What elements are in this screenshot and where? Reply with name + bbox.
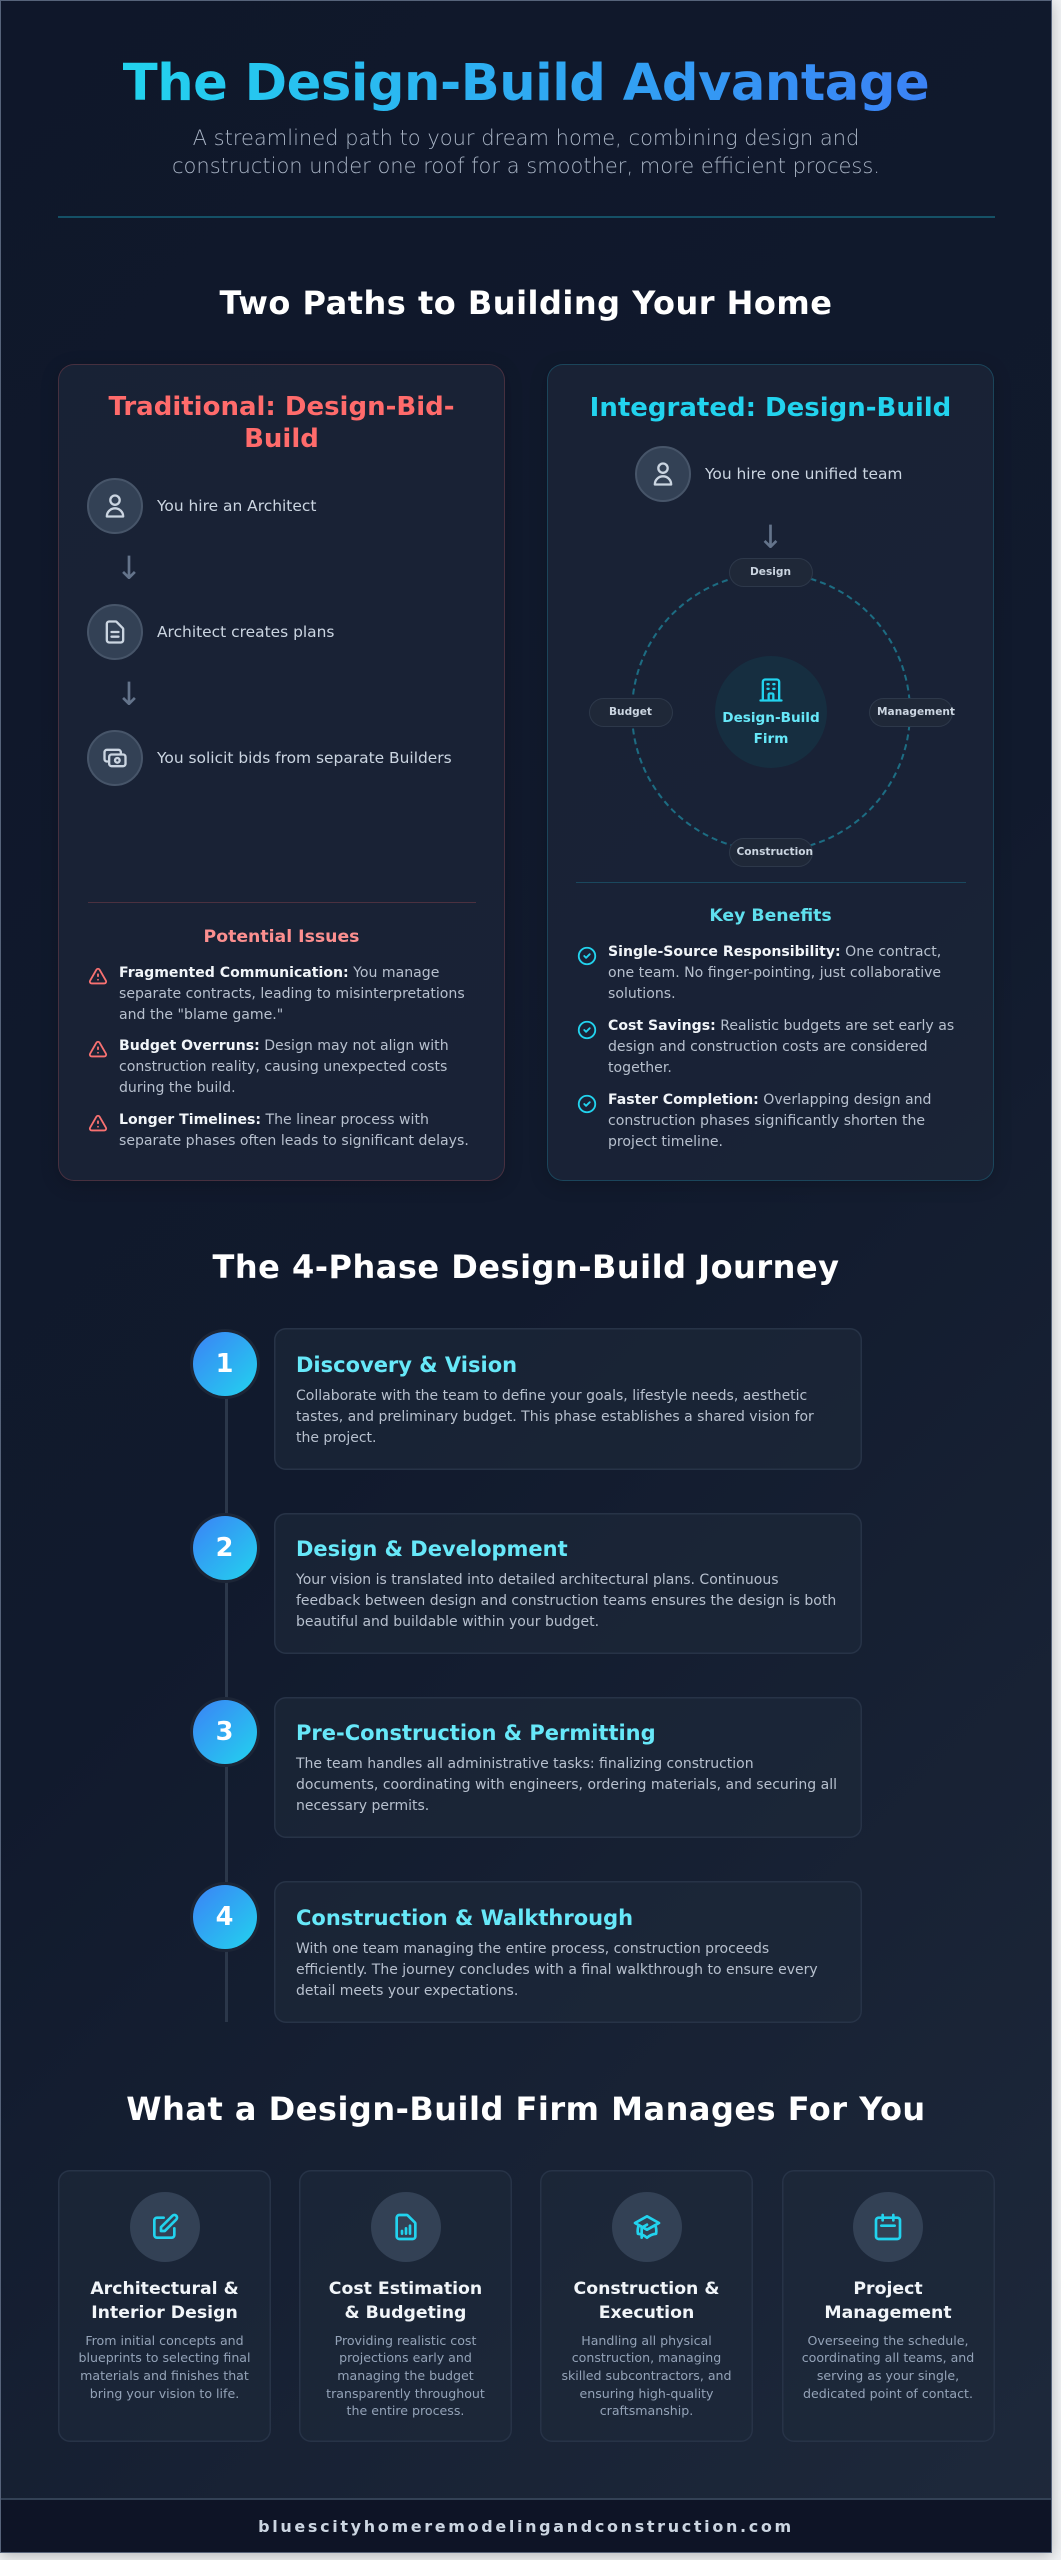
sub-heading: potential issues: Potential Issues	[204, 927, 359, 947]
icon: document	[87, 604, 143, 660]
card title: Construction &	[574, 2279, 719, 2299]
step text: You hire one unified team	[705, 465, 902, 483]
phase text: feedback between design and construction teams ensures the design is both	[296, 1593, 836, 1609]
phase text: With one team managing the entire process, construction proceeds	[296, 1941, 769, 1957]
icon: calendar	[853, 2192, 923, 2262]
icon: check	[578, 946, 596, 966]
card title: Interior Design	[91, 2303, 238, 2323]
phase text: documents, coordinating with engineers, ordering materials, and securing all	[296, 1777, 837, 1793]
phase text: efficiently. The journey concludes with a final walkthrough to ensure every	[296, 1962, 818, 1978]
heading: what a firm manages: What a Design-Build Firm Manages For You	[126, 2090, 926, 2128]
service card: construction	[540, 2170, 753, 2442]
phase card	[274, 1696, 862, 1838]
phase card	[274, 1512, 862, 1654]
number badge	[192, 1332, 256, 1396]
pill: construction	[728, 838, 812, 867]
issue: budget overruns	[88, 1038, 449, 1096]
phase title: Design & Development	[296, 1537, 568, 1561]
phase title: Construction & Walkthrough	[296, 1906, 633, 1930]
benefit text: one team. No finger-pointing, just collaborative	[608, 965, 941, 981]
icon: warning	[88, 968, 108, 984]
card text: skilled subcontractors, and	[561, 2368, 732, 2383]
number badge: 3	[216, 1717, 233, 1747]
card text	[540, 2332, 753, 2420]
panel title: Build	[244, 424, 319, 454]
footer	[0, 2498, 1052, 2553]
pill: construction: Construction	[736, 846, 813, 858]
card text	[299, 2332, 512, 2420]
panel title: Integrated: Design-Build	[590, 393, 951, 423]
phase text	[296, 1941, 818, 1999]
benefit: cost savings	[578, 1018, 954, 1076]
phase text: Collaborate with the team to define your goals, lifestyle needs, aesthetic	[296, 1388, 807, 1404]
issue text: and the "blame game."	[119, 1007, 283, 1023]
card text: Handling all physical	[581, 2333, 712, 2348]
card text: Providing realistic cost	[335, 2333, 476, 2348]
number badge	[192, 1884, 256, 1948]
phase text: detail meets your expectations.	[296, 1983, 518, 1999]
card text	[782, 2332, 994, 2402]
number badge: 2	[216, 1533, 233, 1563]
card title: Project	[853, 2279, 923, 2299]
card title: Management	[824, 2303, 952, 2323]
issue text: Budget Overruns: Design may not align with	[119, 1038, 449, 1054]
phase text: the project.	[296, 1430, 376, 1446]
diagram: design-build hub	[589, 558, 955, 867]
pill: design	[728, 558, 812, 586]
hub label	[722, 710, 820, 747]
card title	[540, 2277, 753, 2326]
issue text: separate contracts, leading to misinterpretations	[119, 986, 465, 1002]
card text: bring your vision to life.	[90, 2386, 239, 2401]
card text: serving as your single,	[817, 2368, 959, 2383]
step: hire architect	[87, 478, 316, 534]
pill: management	[869, 698, 953, 727]
icon: warning	[88, 1040, 108, 1058]
card text: the entire process.	[347, 2403, 464, 2418]
issue: longer timelines	[88, 1112, 469, 1149]
subtitle: construction under one roof for a smoother, more efficient process.	[172, 154, 880, 178]
number badge	[192, 1700, 256, 1764]
card text: coordinating all teams, and	[802, 2350, 974, 2365]
heading: two paths: Two Paths to Building Your Home	[220, 284, 832, 322]
card text: managing the budget	[337, 2368, 474, 2383]
phase text: Your vision is translated into detailed architectural plans. Continuous	[296, 1572, 779, 1588]
benefit text: Single-Source Responsibility: One contract,	[608, 944, 941, 960]
benefit: single source	[578, 944, 941, 1002]
icon: cash	[87, 730, 143, 786]
panel: traditional design-bid-build	[58, 364, 505, 1181]
benefit text: design and construction costs are considered	[608, 1039, 928, 1055]
arrow: ↓	[116, 675, 142, 713]
phase 3	[190, 1697, 862, 1838]
card text: materials and finishes that	[80, 2368, 249, 2383]
phase text: beautiful and buildable within your budget.	[296, 1614, 599, 1630]
benefit text: Faster Completion: Overlapping design and	[608, 1092, 931, 1108]
phase 2	[190, 1513, 862, 1654]
benefit text: project timeline.	[608, 1134, 723, 1150]
card title: Cost Estimation	[329, 2279, 482, 2299]
number badge	[192, 1516, 256, 1580]
subtitle	[172, 126, 880, 178]
issue text: separate phases often leads to significant delays.	[119, 1133, 469, 1149]
card title: & Budgeting	[345, 2303, 466, 2323]
pill: design: Design	[750, 566, 791, 578]
issue text	[119, 1112, 469, 1149]
phase text	[296, 1572, 836, 1630]
title: The Design-Build Advantage	[123, 53, 929, 113]
phase text	[296, 1388, 814, 1446]
card text: Overseeing the schedule,	[808, 2333, 968, 2348]
issue text: construction reality, causing unexpected costs	[119, 1059, 447, 1075]
card text: blueprints to selecting final	[78, 2350, 251, 2365]
card text: projections early and	[339, 2350, 472, 2365]
phase card	[274, 1881, 862, 2022]
phase title: Pre-Construction & Permitting	[296, 1721, 656, 1745]
step: architect plans	[87, 604, 334, 660]
card title	[90, 2279, 239, 2323]
issue text	[119, 1038, 449, 1096]
service card: project management	[782, 2170, 994, 2442]
card title	[782, 2277, 994, 2326]
panel title	[108, 392, 455, 454]
benefit text: construction phases significantly shorten the	[608, 1113, 925, 1129]
issue text: Fragmented Communication: You manage	[119, 965, 439, 981]
phase text	[296, 1756, 837, 1814]
dashed ring	[630, 572, 910, 852]
benefit text: Cost Savings: Realistic budgets are set early as	[608, 1018, 954, 1034]
card text: construction, managing	[572, 2350, 721, 2365]
icon: check	[578, 1020, 596, 1040]
card text: craftsmanship.	[600, 2403, 693, 2418]
step: hire one team	[635, 446, 902, 502]
icon: building	[759, 678, 783, 702]
card text: From initial concepts and	[85, 2333, 244, 2348]
issue: fragmented communication	[88, 965, 465, 1023]
icon: report	[370, 2192, 440, 2262]
card title: Architectural &	[90, 2279, 239, 2299]
issue text: Longer Timelines: The linear process with	[119, 1112, 429, 1128]
service card: architectural design	[58, 2170, 271, 2442]
header	[123, 53, 929, 178]
heading: journey: The 4-Phase Design-Build Journey	[213, 1248, 839, 1286]
pill: management: Management	[877, 706, 955, 718]
benefit: faster completion	[578, 1092, 931, 1150]
panel title: Traditional: Design-Bid-	[108, 392, 455, 422]
hub label: Firm	[754, 731, 788, 747]
icon: user	[87, 478, 143, 534]
arrow: ↓	[116, 549, 142, 587]
pill: budget	[588, 698, 672, 727]
benefit text: together.	[608, 1060, 672, 1076]
subtitle: A streamlined path to your dream home, combining design and	[193, 126, 859, 150]
issue text: during the build.	[119, 1080, 236, 1096]
number badge: 1	[216, 1348, 233, 1378]
phase 4	[190, 1881, 862, 2023]
icon: warning	[88, 1114, 108, 1132]
phase card	[274, 1328, 862, 1470]
card text: dedicated point of contact.	[803, 2386, 973, 2401]
benefit text	[608, 1018, 954, 1076]
footer: bluescityhomeremodelingandconstruction.com	[258, 2517, 794, 2536]
icon: user	[635, 446, 691, 502]
step text: You hire an Architect	[157, 497, 316, 515]
issue text	[119, 965, 465, 1023]
service card: cost estimation	[299, 2170, 512, 2442]
arrow: ↓	[757, 518, 784, 556]
card text: transparently throughout	[326, 2386, 485, 2401]
card text	[78, 2333, 251, 2401]
phase text: The team handles all administrative tasks: finalizing construction	[296, 1756, 754, 1772]
card text: ensuring high-quality	[579, 2386, 714, 2401]
hub label: Design-Build	[722, 710, 820, 726]
card title: Execution	[599, 2303, 694, 2323]
sub-heading: key benefits: Key Benefits	[709, 906, 832, 926]
timeline line	[225, 1340, 228, 2022]
icon: cap	[612, 2192, 682, 2262]
benefit text	[608, 944, 941, 1002]
icon: pencil	[130, 2192, 200, 2262]
number badge: 4	[216, 1902, 233, 1932]
icon: check	[578, 1094, 596, 1114]
card title	[329, 2279, 482, 2323]
step text: Architect creates plans	[157, 623, 334, 641]
benefit text: solutions.	[608, 986, 676, 1002]
phase text: necessary permits.	[296, 1798, 429, 1814]
benefit text	[608, 1092, 931, 1150]
center hub	[715, 656, 827, 768]
phase title: Discovery & Vision	[296, 1353, 517, 1377]
pill: budget: Budget	[609, 706, 652, 718]
step: solicit bids	[87, 730, 452, 786]
step text: You solicit bids from separate Builders	[157, 749, 452, 767]
phase text: tastes, and preliminary budget. This phase establishes a shared vision for	[296, 1409, 814, 1425]
phase 1	[190, 1328, 862, 1470]
panel: integrated design-build	[547, 364, 994, 1181]
